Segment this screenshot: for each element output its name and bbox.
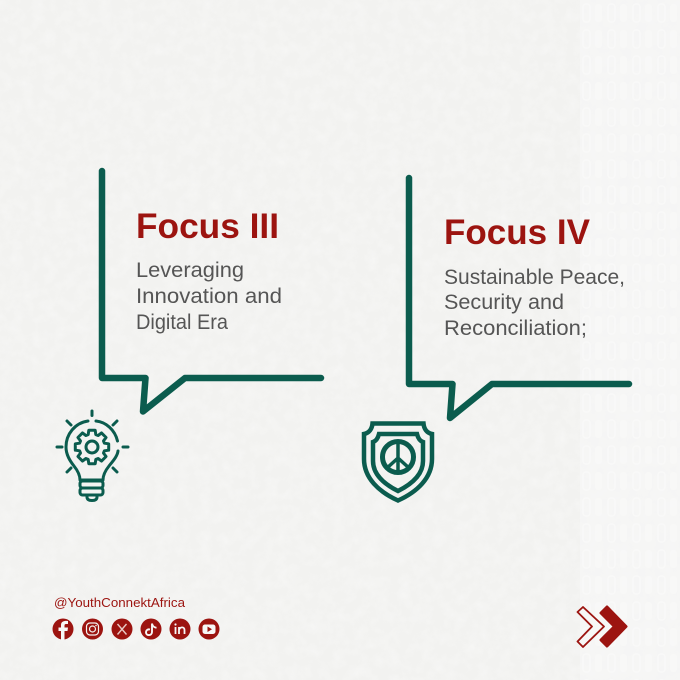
text block: Focus III description: Digital Era [136, 311, 228, 334]
icon: X [112, 618, 132, 640]
arrow: next chevrons [578, 607, 626, 647]
text block: Focus IV description: Security and [444, 291, 564, 314]
icon: instagram [82, 618, 103, 640]
handle text: @YouthConnektAfrica [54, 595, 186, 610]
icon: youtube [198, 618, 220, 640]
icon: tiktok [140, 618, 162, 640]
text block: Focus III description: Innovation and [136, 285, 282, 308]
icon: facebook [52, 618, 74, 640]
text block: Focus IV description: Sustainable Peace, [444, 266, 625, 289]
icon: light bulb with gear [57, 411, 128, 500]
icon: peace shield [364, 424, 432, 500]
heading: Focus IV: Focus IV [444, 213, 591, 252]
social icons [52, 618, 220, 640]
text block: Focus III description [136, 259, 282, 334]
text block: Focus III description: Leveraging [136, 259, 244, 282]
heading: Focus III: Focus III [136, 207, 279, 246]
speech bubble: Focus IV [409, 178, 629, 418]
text block: Focus IV description [444, 266, 625, 340]
icon: linkedin [170, 618, 190, 640]
speech bubble: Focus III [102, 171, 321, 412]
text block: Focus IV description: Reconciliation; [444, 317, 587, 340]
